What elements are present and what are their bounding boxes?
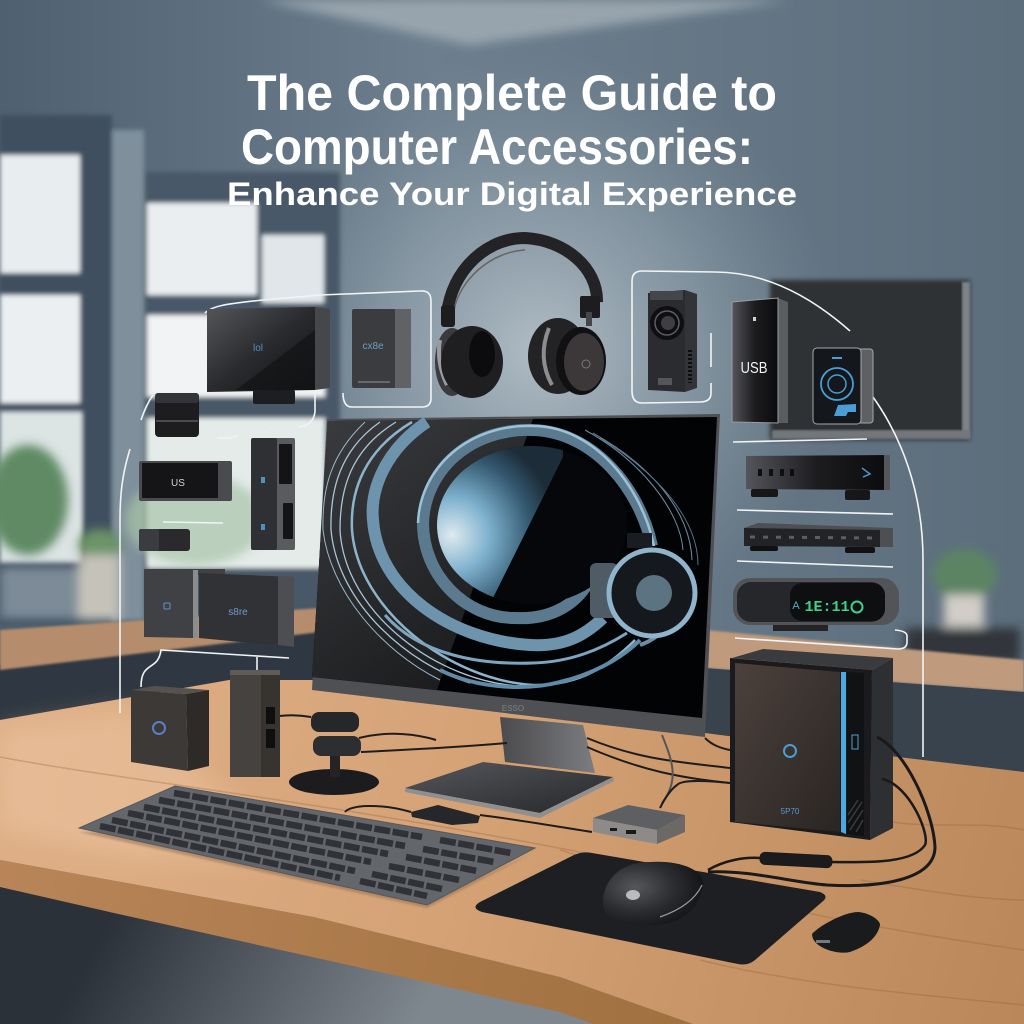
accessory: left column devices: US <box>171 478 185 489</box>
title <box>227 65 797 212</box>
accessory: floating display box: lol <box>253 343 263 354</box>
wireless dongle <box>812 912 880 953</box>
hub <box>593 805 685 844</box>
desk cube accessory <box>131 686 209 771</box>
background: plants and shelf items <box>0 445 1020 662</box>
desk webcam stand <box>289 712 379 795</box>
keyboard <box>79 786 535 908</box>
accessory: tablet device with blue rings <box>813 348 873 424</box>
accessory: small box <box>352 309 411 388</box>
accessory: USB drive: USB <box>740 360 768 377</box>
background: windows <box>0 115 340 625</box>
accessory: right column routers: A <box>792 600 800 612</box>
screen artwork: knob <box>590 550 695 636</box>
desk <box>0 680 1024 1024</box>
screen artwork: central sphere <box>418 426 654 618</box>
tower PC <box>730 649 893 840</box>
tower PC: 5P70 <box>781 807 800 816</box>
accessory: left column devices <box>139 393 295 647</box>
cables behind tower <box>279 715 730 832</box>
background: side counters <box>0 608 1024 790</box>
icon: headphones <box>435 238 606 398</box>
title: Computer Accessories: <box>241 119 753 175</box>
monitor screen <box>312 417 717 718</box>
mouse <box>603 862 703 925</box>
accessory: webcam <box>648 290 697 392</box>
screen artwork: rings <box>323 422 698 687</box>
accessory: small box: cx8e <box>362 341 384 352</box>
cables right of tower with inline dongle <box>708 737 935 886</box>
monitor bezel <box>312 414 720 737</box>
title: The Complete Guide to <box>247 65 777 121</box>
accessory: left column devices: s8re <box>228 607 248 618</box>
main monitor <box>312 414 720 818</box>
title: Enhance Your Digital Experience <box>227 176 797 212</box>
desk tall hub accessory <box>230 670 280 777</box>
accessory: right column routers: 1E:11 <box>804 599 850 616</box>
small dongle <box>411 805 480 825</box>
mouse pad <box>475 852 826 964</box>
accessory: right column routers <box>733 455 899 631</box>
accessory: floating display box <box>207 307 330 404</box>
monitor logo: ESSO <box>502 704 524 713</box>
connector lines <box>120 271 923 757</box>
accessory: USB drive <box>732 298 788 423</box>
monitor stand <box>405 717 614 818</box>
